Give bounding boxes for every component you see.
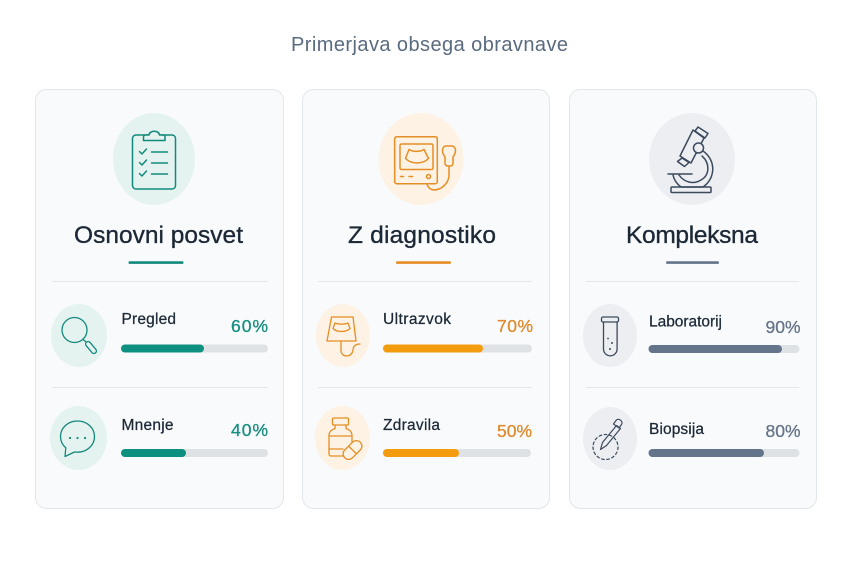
progress bar (121, 449, 268, 457)
accent underline (666, 261, 719, 264)
row: Biopsija (583, 407, 800, 470)
icon: ultrasound machine (378, 113, 464, 205)
icon: microscope (649, 113, 735, 205)
value: 60% (231, 316, 268, 336)
icon: clipboard (113, 113, 195, 205)
heading: Kompleksna: Kompleksna (626, 222, 758, 249)
value: 50% (497, 421, 532, 441)
icon: biopsy needle (583, 407, 637, 470)
row: Mnenje (50, 406, 268, 470)
icon: medicine bottle and pill (315, 406, 370, 470)
progress bar (383, 344, 532, 352)
value: 90% (766, 317, 800, 337)
progress bar (121, 344, 268, 352)
progress bar (648, 345, 800, 353)
progress bar (648, 449, 800, 457)
panel: Kompleksna (570, 90, 816, 508)
icon: ultrasound probe (316, 304, 370, 367)
panel: Osnovni posvet (36, 90, 284, 508)
label: Mnenje (122, 417, 174, 434)
label: Laboratorij (649, 314, 722, 330)
label: Pregled (122, 311, 176, 328)
row: Ultrazvok (316, 304, 533, 367)
progress bar (383, 449, 531, 457)
label: Ultrazvok (383, 311, 451, 328)
title: Primerjava obsega obravnave (291, 34, 568, 56)
panel: Z diagnostiko (302, 90, 550, 508)
icon: speech bubble (50, 406, 107, 470)
label: Zdravila (383, 417, 440, 434)
label: Biopsija (649, 421, 704, 438)
heading: Osnovni posvet: Osnovni posvet (74, 222, 243, 249)
value: 70% (497, 316, 533, 336)
icon: magnifier (51, 304, 107, 367)
row: Pregled (51, 304, 268, 367)
accent underline (128, 261, 184, 264)
value: 80% (766, 421, 800, 441)
heading: Z diagnostiko: Z diagnostiko (348, 222, 496, 249)
row: Zdravila (315, 406, 532, 470)
accent underline (396, 261, 451, 264)
icon: test tube (583, 304, 637, 367)
row: Laboratorij (583, 304, 800, 367)
value: 40% (231, 420, 268, 440)
